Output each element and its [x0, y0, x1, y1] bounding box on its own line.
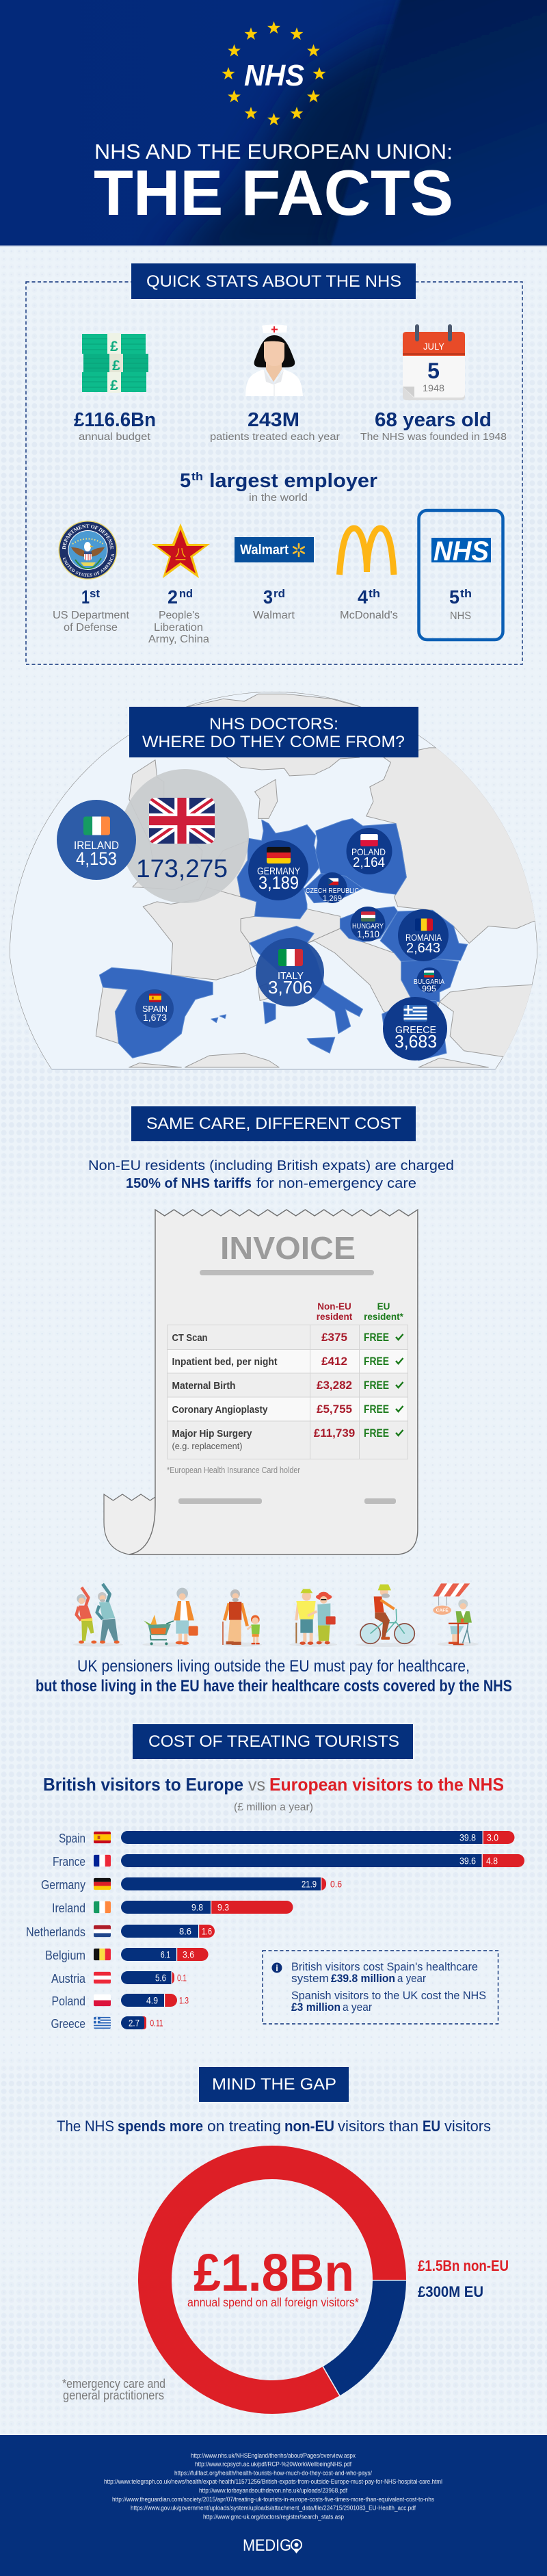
footer [0, 2435, 547, 2576]
stat: patients [210, 409, 340, 443]
heading: quick stats [131, 263, 416, 299]
icon: calendar: JULY [423, 341, 445, 352]
row: Belgium [45, 1948, 209, 1962]
bubble: Italy: ITALY [278, 970, 304, 982]
row: Greece: 0.11 [150, 2017, 163, 2028]
bubble: Bulgaria [414, 967, 444, 993]
map: Europe [0, 692, 547, 1070]
bubble: Hungary: 1,510 [357, 928, 379, 939]
stat: age: 68 years old [375, 409, 492, 431]
row: Greece: 2.7 [129, 2017, 139, 2028]
text: non-EU tariffs [88, 1158, 454, 1191]
sources: https://www.gov.uk/government/uploads/system/uploads/attachment_data/file/224715/2901083_EU-Health_acc.pdf [131, 2504, 416, 2512]
sources: http://www.telegraph.co.uk/news/health/expat-health/11571256/British-expats-from-outside-Europe-must-pay-for-NHS-hospital-care.html [104, 2478, 442, 2486]
rank 1 [53, 586, 130, 634]
price table: £3,282 [317, 1379, 352, 1392]
stat: patients: patients treated each year [210, 431, 340, 443]
bubble: Czech Republic: CZECH REPUBLIC [306, 887, 359, 895]
heading: 5th largest employer: in the world [249, 492, 308, 504]
title: THE FACTS [94, 157, 453, 229]
subheading: visitors [444, 2118, 491, 2135]
rank 2: People's [159, 610, 200, 621]
rank 1: 1 [81, 586, 90, 608]
row: Netherlands: 1.6 [202, 1925, 212, 1936]
row: Germany: Germany [41, 1878, 85, 1892]
icon: info: i [276, 1963, 278, 1973]
price table: FREE [364, 1427, 389, 1440]
price table: Major Hip Surgery [172, 1428, 252, 1440]
bubble: Romania: ROMANIA [405, 933, 442, 943]
bubble: Greece: 3,683 [395, 1031, 437, 1052]
icon: calendar: 5 [427, 359, 440, 383]
rank 4: McDonald's [340, 610, 398, 621]
row: France [53, 1854, 524, 1869]
price table: £375 [321, 1331, 347, 1344]
invoice title: INVOICE [220, 1230, 356, 1266]
sources: http://www.theguardian.com/society/2015/apr/07/treating-uk-tourists-in-europe-costs-five-times-more-than-equivalent-cost-to-nhs [112, 2496, 434, 2503]
heading: doctors: WHERE DO THEY COME FROM? [142, 733, 405, 751]
price table: (e.g. replacement) [172, 1441, 242, 1451]
bubble: Italy: 3,706 [268, 977, 312, 998]
woman at cafe [433, 1583, 479, 1646]
row: Germany: 21.9 [302, 1879, 317, 1890]
price table: FREE [364, 1331, 389, 1344]
invoice title [200, 1230, 374, 1275]
bubble: Spain: SPAIN [142, 1004, 168, 1014]
icons: pensioners left group [73, 1584, 262, 1647]
sources: http://www.gmc-uk.org/doctors/register/search_stats.asp [203, 2514, 344, 2521]
panel: mind the gap [57, 2067, 509, 2414]
subheading [57, 2118, 491, 2135]
rank 5 [449, 586, 472, 622]
heading: 5th largest employer [180, 470, 377, 504]
rank 3: rd [274, 587, 285, 600]
bubble: Ireland: IRELAND [74, 839, 119, 852]
row: Spain: Spain [59, 1832, 85, 1845]
bubble: Italy [256, 938, 324, 1006]
chart title: British visitors to Europe [43, 1774, 243, 1795]
EU stars and NHS logo [222, 21, 325, 125]
heading: mind the gap: MIND THE GAP [212, 2075, 336, 2094]
price table: £5,755 [317, 1403, 352, 1416]
heading: 5th largest employer: largest employer [209, 470, 377, 492]
row: Poland: 4.9 [146, 1995, 158, 2006]
subheading: spends more [118, 2118, 203, 2135]
bubble: Czech Republic: 1,269 [323, 894, 342, 903]
heading: same care: SAME CARE, DIFFERENT COST [146, 1115, 401, 1133]
price table [167, 1325, 408, 1459]
bubble: United Kingdom [120, 769, 249, 903]
bubble: Poland [346, 828, 392, 874]
bubble: Germany: 3,189 [258, 872, 299, 893]
callout: Spain comparison: £3 million [291, 2001, 341, 2014]
price table: Maternal Birth [172, 1380, 235, 1392]
bubble: Greece: GREECE [395, 1024, 436, 1036]
bubble: Bulgaria: BULGARIA [414, 978, 444, 986]
logo: US Department of Defense seal: DEPARTMENT OF DEFENSE [62, 524, 114, 549]
bubble: Spain [135, 989, 174, 1028]
column headers: resident [317, 1312, 353, 1322]
chart title: European visitors to the NHS [269, 1774, 504, 1795]
logo: People's Liberation Army star [152, 523, 210, 578]
donut chart [138, 2146, 406, 2414]
rank 3: 3 [263, 586, 273, 608]
row: Poland [52, 1994, 189, 2008]
row: Austria: 0.1 [177, 1972, 187, 1983]
column headers [317, 1301, 404, 1322]
sources: https://fullfact.org/health/health-tourists-how-much-do-they-cost-and-who-pays/ [174, 2470, 372, 2477]
legend: non-EU: £1.5Bn non-EU [418, 2257, 509, 2274]
grandfather and child [223, 1589, 262, 1647]
heading: doctors: NHS DOCTORS: [209, 715, 338, 733]
price table: Inpatient bed, per night [172, 1356, 278, 1368]
panel: quick stats [25, 263, 523, 665]
subheading: The NHS [57, 2118, 114, 2135]
row: Austria: 5.6 [155, 1972, 166, 1983]
price table: £412 [321, 1355, 347, 1368]
footnote [62, 2377, 165, 2402]
callout: Spain comparison [263, 1951, 498, 2024]
heading: mind the gap [199, 2067, 349, 2102]
bubble: United Kingdom: 173,275 [136, 855, 228, 883]
logo: People's Liberation Army star: 一 [175, 551, 186, 567]
sources: http://www.nhs.uk/NHSEngland/thenhs/about/Pages/overview.aspx [191, 2452, 356, 2460]
row: Germany [41, 1877, 342, 1892]
logo: US Department of Defense seal: UNITED STATES OF AMERICA [63, 554, 115, 577]
price table: FREE [364, 1403, 389, 1416]
title: NHS AND THE EUROPEAN UNION: [94, 140, 453, 164]
row: Spain [59, 1831, 514, 1845]
heading: quick stats: QUICK STATS ABOUT THE NHS [146, 272, 401, 291]
price table: FREE [364, 1379, 389, 1392]
icon: money stack: £ [110, 378, 118, 393]
stat: patients: 243M [248, 409, 299, 431]
header banner: EU flag [0, 0, 547, 267]
row: Austria: Austria [51, 1972, 86, 1986]
rank 5: 5 [449, 586, 459, 608]
icon: calendar [403, 324, 465, 400]
subheading: visitors than [338, 2118, 418, 2135]
row: Netherlands [26, 1925, 215, 1939]
logo: Medigo: MEDIG [243, 2536, 291, 2555]
rank 1: US Department [53, 610, 130, 621]
row: Belgium: 3.6 [183, 1949, 194, 1960]
rank 4: th [369, 587, 380, 600]
heading: tourists: COST OF TREATING TOURISTS [148, 1732, 399, 1751]
row: Poland: 1.3 [179, 1995, 189, 2006]
row: Belgium: 6.1 [161, 1949, 170, 1960]
bubble: Germany: GERMANY [257, 866, 300, 877]
dashed frame [26, 282, 522, 664]
row: Netherlands: 8.6 [179, 1925, 191, 1936]
heading: 5th largest employer: 5 [180, 470, 191, 492]
invoice total bars [178, 1498, 396, 1504]
row: France: 4.8 [486, 1856, 498, 1866]
bubble: Poland: POLAND [351, 846, 386, 857]
heading: 5th largest employer: th [191, 470, 203, 483]
bubble: Ireland: 4,153 [76, 848, 117, 869]
chart title [43, 1774, 504, 1813]
invoice footnote: *European Health Insurance Card holder [167, 1466, 300, 1475]
couple exercising [73, 1584, 123, 1647]
row: France: France [53, 1855, 85, 1869]
price table: Coronary Angioplasty [172, 1404, 268, 1416]
column headers: EU [377, 1301, 390, 1312]
invoice receipt [104, 1210, 418, 1554]
rank 2 [148, 586, 209, 645]
sources [104, 2452, 442, 2521]
text: non-EU tariffs: 150% of NHS tariffs [126, 1176, 252, 1191]
woman at cafe: CAFÉ [436, 1607, 449, 1613]
logo: People's Liberation Army star: 八 [175, 543, 186, 560]
heading: tourists [133, 1724, 413, 1759]
sources: http://www.rcpsych.ac.uk/pdf/RCP-%20WorkWellbeingNHS.pdf [195, 2460, 351, 2469]
senior couple [289, 1589, 337, 1647]
bubble: Hungary [350, 907, 386, 941]
logo: McDonald's arches [339, 528, 394, 575]
rank 4: 4 [358, 586, 368, 608]
heading: same care [131, 1106, 416, 1141]
row: Ireland [52, 1901, 293, 1915]
icons: pensioners right group [289, 1583, 479, 1647]
highlight: NHS rank card: NHS [433, 536, 489, 567]
callout: Spain comparison: British visitors cost Spain's healthcare [291, 1960, 478, 1973]
callout: Spain comparison: a year [397, 1972, 426, 1985]
sources: http://www.torbayandsouthdevon.nhs.uk/uploads/23968.pdf [199, 2487, 347, 2495]
stat: budget: annual budget [79, 431, 151, 443]
price table: CT Scan [172, 1332, 208, 1344]
callout: Spain comparison: a year [343, 2001, 372, 2014]
price table: £11,739 [314, 1427, 355, 1440]
cyclist [356, 1585, 417, 1647]
icon: money stack [82, 333, 148, 393]
row: Ireland: Ireland [52, 1901, 85, 1915]
rank 5: NHS [450, 610, 471, 622]
row: Spain: 39.8 [459, 1832, 476, 1843]
row: Poland: Poland [52, 1994, 85, 2008]
price table: FREE [364, 1355, 389, 1368]
row: Germany: 0.6 [330, 1879, 342, 1890]
donut centre value: £1.8Bn [194, 2243, 354, 2302]
EU stars and NHS logo: NHS [244, 59, 304, 92]
logo: Walmart: Walmart [240, 543, 289, 558]
bubble: Romania [398, 909, 449, 961]
row: Netherlands: Netherlands [26, 1925, 85, 1939]
rank 5: th [460, 587, 472, 600]
bubble: Ireland [57, 800, 136, 880]
bubble: Poland: 2,164 [353, 855, 385, 870]
panel: same care, different cost [36, 1106, 512, 1695]
subheading: on treating [207, 2118, 281, 2135]
bubble: Greece [383, 997, 447, 1061]
subheading: EU [423, 2118, 440, 2135]
column headers: resident* [364, 1312, 404, 1322]
rank 2: nd [179, 587, 193, 600]
icon: nurse [245, 324, 303, 396]
logo: US Department of Defense seal [59, 521, 118, 580]
stat: age [360, 409, 507, 443]
row: France: 39.6 [459, 1856, 476, 1866]
panel: doctors map [0, 692, 547, 1070]
chart title: vs [248, 1774, 265, 1795]
bubble: Czech Republic [306, 872, 359, 903]
row: Belgium: Belgium [45, 1949, 85, 1962]
icon: calendar: 1948 [423, 382, 444, 393]
callout: Spain comparison: Spanish visitors to the UK cost the NHS [291, 1989, 486, 2002]
row: Ireland: 9.8 [191, 1902, 203, 1913]
highlight: NHS rank card [418, 510, 503, 640]
rank 3: Walmart [253, 610, 295, 621]
row: Austria [51, 1971, 187, 1986]
row: Greece [51, 2016, 163, 2031]
column headers: Non-EU [317, 1301, 351, 1312]
icon: money stack: £ [110, 339, 118, 354]
icon: money stack: £ [112, 358, 120, 374]
stat: budget [74, 409, 156, 443]
heading: doctors [129, 707, 418, 757]
logo: Walmart [235, 537, 314, 562]
bubble: Germany [248, 840, 308, 900]
donut centre value: annual spend on all foreign visitors* [187, 2295, 359, 2309]
bubble: Romania: 2,643 [406, 941, 440, 956]
row: Spain: 3.0 [487, 1832, 498, 1843]
bubble: Spain: 1,673 [143, 1012, 167, 1023]
row: Greece: Greece [51, 2017, 85, 2031]
subheading: non-EU [284, 2118, 334, 2135]
rank 2: 2 [168, 586, 178, 608]
rank 2: Army, China [148, 634, 209, 645]
footnote: general practitioners [63, 2389, 164, 2402]
bubble: Hungary: HUNGARY [352, 922, 384, 931]
bar chart [26, 1831, 524, 2031]
text: non-EU tariffs: Non-EU residents (including British expats) are charged [88, 1158, 454, 1173]
rank 1: of Defense [64, 622, 118, 634]
stat: budget: £116.6Bn [74, 409, 156, 431]
chart title: (£ million a year) [234, 1801, 313, 1813]
text: pensioners: UK pensioners living outside the EU must pay for healthcare, [77, 1657, 470, 1676]
row: Ireland: 9.3 [217, 1902, 229, 1913]
shopper with trolley [142, 1588, 198, 1647]
text: non-EU tariffs: for non-emergency care [256, 1176, 416, 1191]
text: pensioners [36, 1657, 512, 1695]
icon: info [272, 1962, 282, 1973]
legend: EU: £300M EU [418, 2283, 483, 2300]
rank 3 [253, 586, 295, 621]
stat: age: The NHS was founded in 1948 [360, 431, 507, 443]
rank 4 [340, 586, 398, 621]
rank 1: st [90, 587, 100, 600]
callout: Spain comparison: £39.8 million [331, 1972, 395, 1985]
callout: Spain comparison: system [291, 1972, 329, 1985]
panel: cost of treating tourists [26, 1724, 524, 2031]
rank 2: Liberation [154, 622, 203, 634]
bubble: Bulgaria: 995 [422, 984, 436, 993]
footnote: *emergency care and [62, 2377, 165, 2391]
